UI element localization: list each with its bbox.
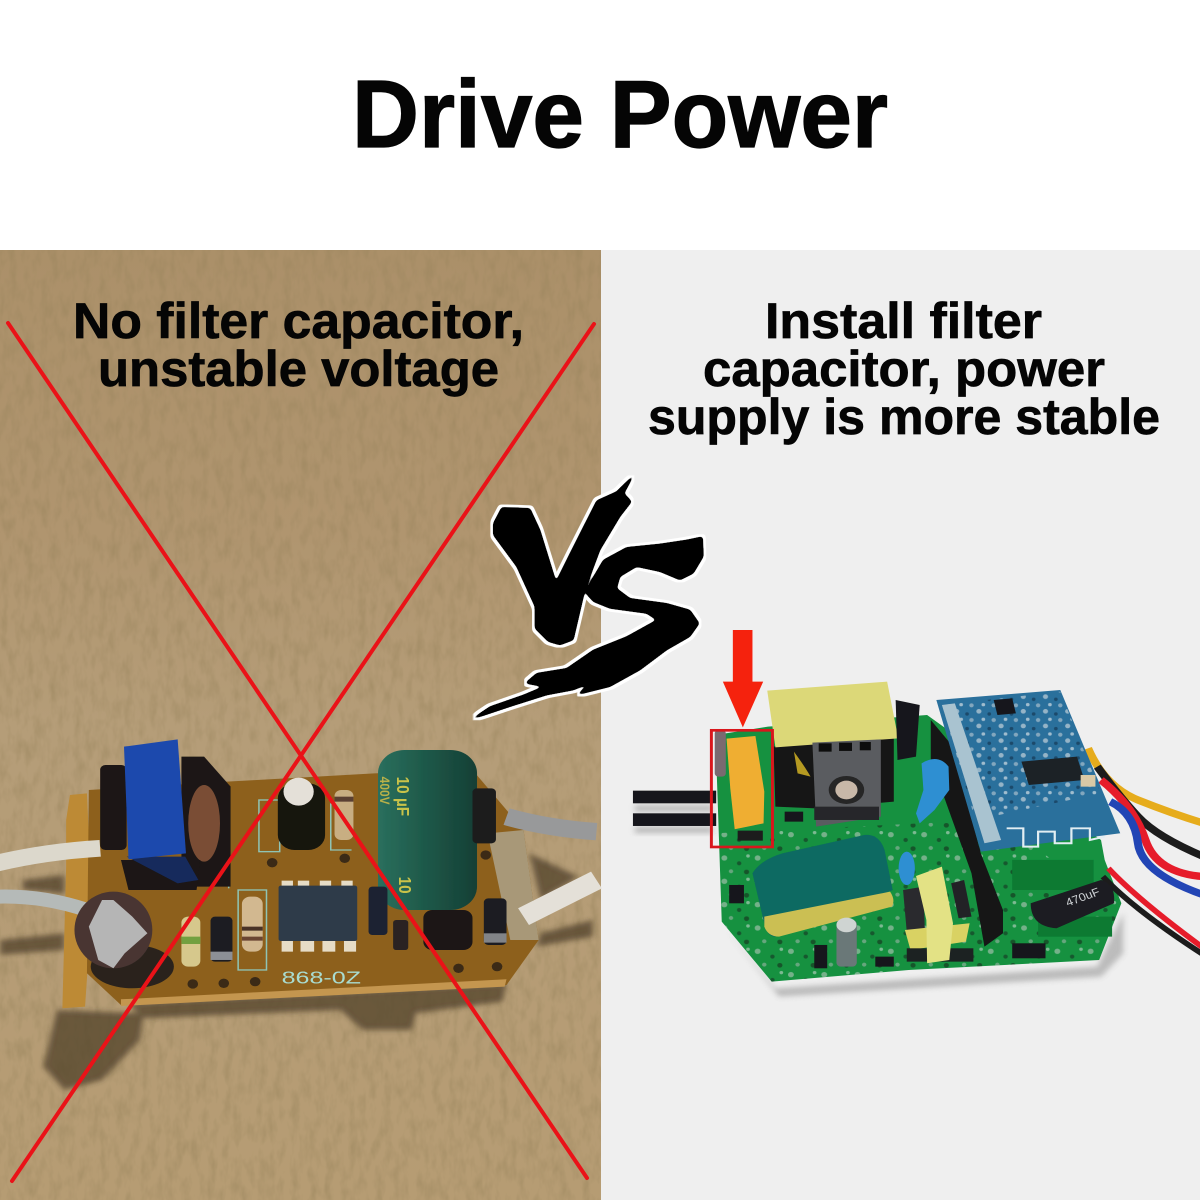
cables: [0, 848, 100, 863]
large green capacitor: [377, 750, 477, 910]
varistor capacitor: [74, 892, 174, 988]
transformer: [100, 739, 231, 890]
black 470uF capacitor: [1031, 880, 1114, 928]
green lower detail: [1012, 860, 1112, 937]
yellow filter capacitor: [727, 736, 764, 829]
heat sink: [812, 739, 881, 827]
heading: install filter capacitor: capacitor, power: [703, 341, 1105, 397]
black connector strip: [931, 720, 1003, 947]
large green capacitor: 400V: [377, 777, 393, 805]
small blue capacitor: [899, 852, 915, 885]
heading: no filter capacitor: unstable voltage: [98, 341, 499, 397]
left tab: [62, 793, 94, 1008]
input cables: [633, 791, 716, 803]
output cables: [1088, 748, 1200, 955]
heading: no filter capacitor: No filter capacitor,: [73, 293, 524, 349]
red arrow: [723, 630, 763, 727]
photo: circuit board with filter capacitor: [633, 630, 1200, 997]
main transformer: [767, 682, 898, 747]
blue disc capacitor: [916, 759, 949, 823]
small electrolytic capacitor: [278, 778, 325, 850]
large green capacitor: 10: [395, 877, 414, 894]
component specks on board: [715, 820, 1121, 982]
IC chip: [279, 881, 357, 952]
coil behind capacitor: [715, 730, 726, 777]
panel: with filter capacitor: [601, 250, 1200, 1200]
green board: [715, 715, 1121, 982]
black 470uF capacitor: 470uF: [1063, 885, 1102, 909]
small yellow transformer: [903, 867, 973, 963]
wifi module: [936, 690, 1120, 852]
silkscreen part number: 868-0Z: [282, 967, 361, 987]
large teal capacitor: [752, 835, 893, 937]
heading: install filter capacitor: Install filter: [765, 293, 1042, 349]
solder holes: [187, 850, 502, 989]
vs emblem: [470, 473, 703, 720]
heading: install filter capacitor: supply is more stable: [648, 389, 1160, 445]
red cross: [8, 323, 594, 1181]
board shadow: [727, 913, 1123, 997]
diodes and resistors: [181, 788, 507, 967]
panel: without filter capacitor: [0, 250, 601, 1200]
heading: no filter capacitor: [73, 293, 524, 397]
small black components: [729, 812, 1046, 968]
silk outlines: [229, 787, 352, 970]
black cavity under transformer: [774, 737, 894, 808]
red highlight box: [711, 730, 772, 847]
vertical black component: [896, 700, 920, 760]
heading: install filter capacitor: [648, 293, 1160, 445]
silver small capacitor: [836, 920, 857, 967]
board shadows: [0, 853, 593, 1090]
large green capacitor: 10 µF: [393, 777, 412, 816]
top resistor: [335, 790, 353, 840]
title: Drive Power: [352, 61, 888, 168]
board: [87, 770, 539, 1005]
header background: [0, 0, 1200, 250]
photo: circuit board without filter capacitor: [0, 739, 596, 1090]
